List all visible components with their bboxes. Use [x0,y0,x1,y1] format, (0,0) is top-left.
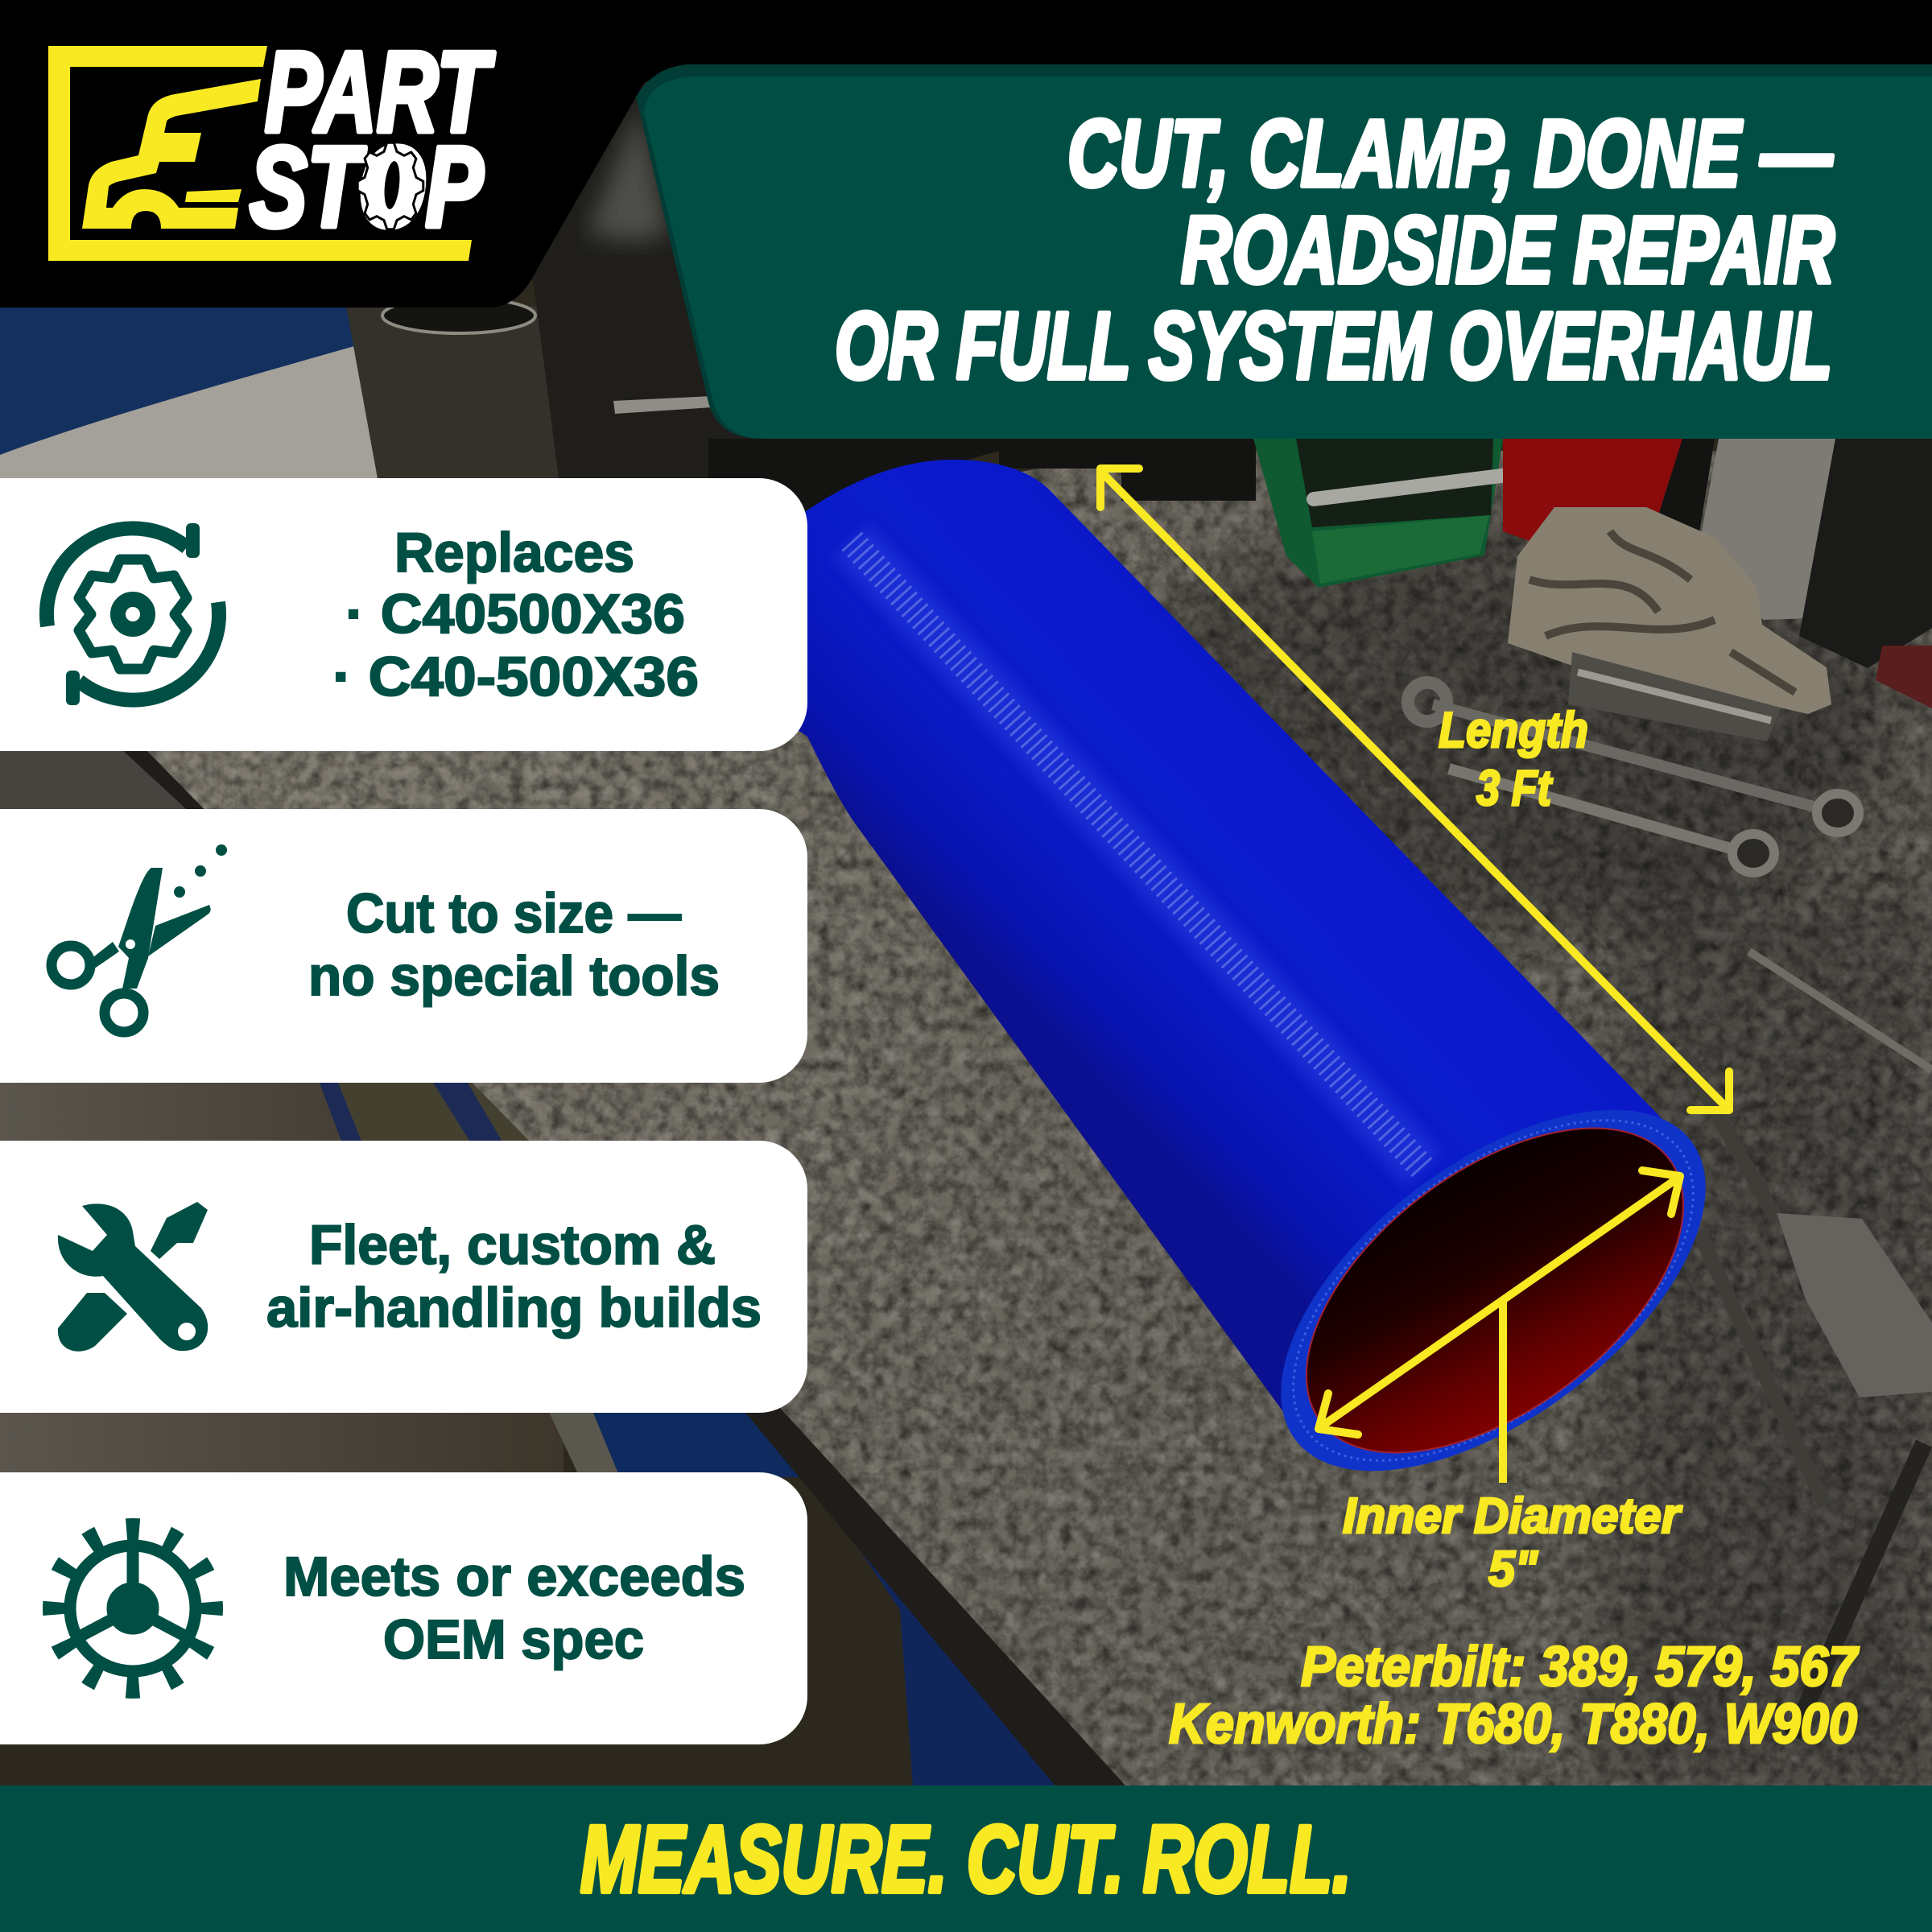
card 1 text [332,522,699,708]
arrow: length [1100,469,1729,1110]
metal table top [145,451,1932,1787]
card 3 [0,1141,807,1413]
dark objects behind hose [708,439,1256,515]
gap two to three, olive panel and blue strips [318,1079,531,1143]
card 3 text [266,1214,762,1339]
dark exhaust pipe [346,306,564,483]
blue strip lower [851,1537,1071,1787]
red container [1503,439,1682,541]
black gap [1658,439,1715,538]
length label: 3 Ft [1476,761,1553,816]
white ledge [0,346,385,483]
inner diameter label: 5" [1488,1542,1539,1597]
silver bushing [1568,652,1781,741]
flat bar upper [1680,1050,1777,1219]
inner diameter label: Inner Diameter [1343,1488,1682,1544]
grey sleeve [588,105,668,242]
logo wordmark: STOP [250,123,483,251]
upper gap, left dark region [0,749,201,813]
blue floor mat [0,306,354,455]
black screwdriver [1793,1443,1924,1736]
gap three to four, brown [0,1409,564,1477]
logo frame [48,46,472,261]
card 4 text: Meets or exceeds [283,1546,745,1608]
card 2 text: Cut to size — [346,882,681,944]
card 1 text: · C40-500X36 [332,646,699,708]
ribbed highlight sheen [852,541,1423,1169]
headline text [835,101,1835,399]
card 1 text: · C40500X36 [345,583,685,645]
card 4 text [283,1546,745,1670]
card 1 [0,478,807,751]
compatible trucks [1169,1635,1860,1755]
blue panel [592,1409,805,1477]
green toolbox [1253,439,1508,588]
table front edge [121,749,1135,1787]
blue silicone hose [789,460,1768,1542]
wrench upper [1408,683,1859,832]
gap three to four, grey panel [547,1409,620,1477]
logo truck [82,79,261,229]
logo gear [357,142,423,229]
pipe rim [382,298,535,333]
logo wordmark: PART [265,28,495,156]
compatible trucks: Peterbilt: 389, 579, 567 [1301,1635,1860,1698]
card 2 text [308,882,720,1007]
card 2 text: no special tools [308,945,720,1007]
length label [1439,703,1588,816]
card 4 text: OEM spec [383,1608,644,1670]
icon: gear with spokes [54,1530,212,1687]
length label: Length [1439,703,1588,758]
black bottle [1799,439,1932,668]
gap two to three, left brown [0,1079,483,1145]
red hose interior [1249,1064,1740,1517]
dark vignette lower right [1610,886,1932,1787]
icon: wrench and screwdriver [58,1202,208,1352]
logo wordmark [250,28,495,251]
card 2 [0,809,807,1083]
dark vignette upper right [1087,515,1892,934]
logo [48,28,495,261]
icon: gear cycle [47,523,219,705]
ribbed highlight [852,541,1423,1169]
dark column [531,80,813,515]
hose rim [1219,1039,1768,1542]
logo panel [0,0,1932,308]
card 1 text: Replaces [394,522,634,584]
compatible trucks: Kenworth: T680, T880, W900 [1169,1692,1857,1755]
steel rod [1749,952,1932,1070]
steel bracket [1777,1213,1932,1397]
card 3 text: Fleet, custom & [309,1214,716,1276]
icon: scissors [52,844,227,1032]
red screwdriver handle [1876,646,1932,708]
logo truck bar [185,189,242,202]
footer band [0,1785,1932,1932]
inner diameter label [1343,1488,1682,1597]
shop rag [1508,507,1831,714]
silver clamp [613,396,712,414]
flat bar lower [1699,1231,1825,1506]
headline banner [636,64,1932,439]
wrench lower [1449,769,1774,873]
arrow: inner diameter [1319,1170,1680,1483]
card 3 text: air-handling builds [266,1277,762,1339]
card 4 [0,1472,807,1744]
grey cylinder [1702,439,1850,620]
footer slogan: MEASURE. CUT. ROLL. [580,1806,1352,1913]
